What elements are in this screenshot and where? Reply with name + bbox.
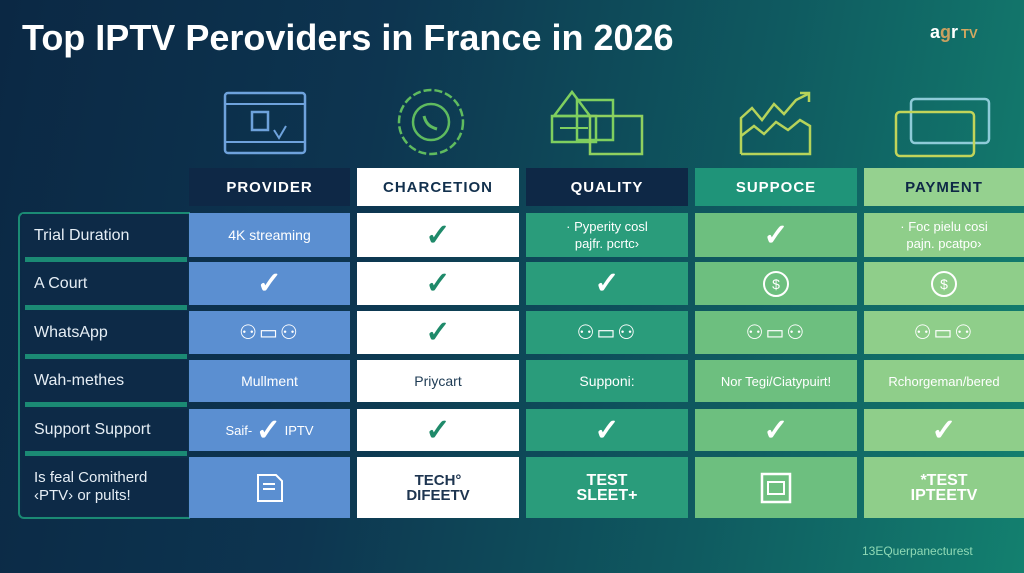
table body: $ [940, 276, 948, 292]
panel: row labels [18, 212, 190, 519]
table body: Supponi: [579, 373, 635, 389]
row 3 [189, 311, 350, 354]
text: WhatsApp [34, 324, 108, 340]
table body: Priycart [414, 373, 462, 389]
row 5: ✓ [256, 414, 281, 446]
text: Is feal Comitherd [34, 469, 147, 486]
table body: ✓ [931, 414, 957, 446]
table body: pajn. pcatpo› [906, 236, 982, 251]
icon: documents [894, 98, 990, 158]
icon: browser [224, 92, 306, 154]
table body: pajfr. pcrtc› [575, 236, 639, 251]
table body: ✓ [425, 316, 451, 349]
table body: ✓ [763, 218, 789, 252]
table body: TEST [587, 472, 627, 488]
text: Support Support [34, 421, 151, 438]
table body: ✓ [594, 414, 620, 446]
table body: *TEST [920, 472, 968, 488]
table body: ✓ [425, 267, 451, 300]
table body: ✓ [425, 218, 451, 252]
row 6 [189, 457, 350, 518]
table body: Rchorgeman/bered [888, 374, 1000, 388]
table body: ⚇▭⚇ [914, 322, 974, 344]
header row: QUALITY [571, 178, 643, 196]
table body: Nor Tegi/Ciatypuirt! [721, 374, 831, 388]
table body: · Foc pielu cosi [900, 219, 988, 234]
table body: $ [772, 276, 780, 292]
logo: agrTV [930, 22, 978, 42]
table body: SLEET+ [577, 486, 637, 504]
row 1: 4K streaming [228, 227, 311, 243]
row 4: Mullment [241, 373, 298, 389]
table body: ⚇▭⚇ [577, 322, 637, 344]
header row: SUPPOCE [736, 178, 816, 196]
row 4 [189, 360, 350, 402]
header row: CHARCETION [383, 178, 493, 196]
table body: IPTEETV [911, 486, 977, 504]
footer text: 13EQuerpanecturest [862, 544, 973, 558]
row 2 [189, 262, 350, 305]
table body: · Pyperity cosl [566, 219, 648, 234]
icon: cards [550, 90, 644, 156]
table body: DIFEETV [406, 486, 470, 504]
header row: PAYMENT [905, 178, 983, 196]
row 1 [189, 213, 350, 257]
title: Top IPTV Peroviders in France in 2026 [22, 17, 674, 58]
text: A Court [34, 274, 87, 292]
text: ‹PTV› or pults! [34, 487, 131, 504]
icon: whatsapp badge [398, 88, 464, 156]
text: Wah-methes [34, 372, 124, 389]
table body: ✓ [425, 414, 451, 446]
text: Trial Duration [34, 226, 129, 244]
row 5 [189, 409, 350, 451]
header row [206, 168, 1024, 206]
table body: ⚇▭⚇ [746, 322, 806, 344]
header row: PROVIDER [226, 178, 313, 196]
row 5: Saif- IPTV [226, 422, 314, 438]
row 3: ⚇▭⚇ [239, 322, 300, 344]
row 2: ✓ [257, 267, 282, 300]
table body: TECH° [415, 472, 461, 488]
table body: ✓ [763, 414, 789, 446]
table body: ✓ [594, 267, 620, 300]
icon: chart [740, 92, 812, 156]
